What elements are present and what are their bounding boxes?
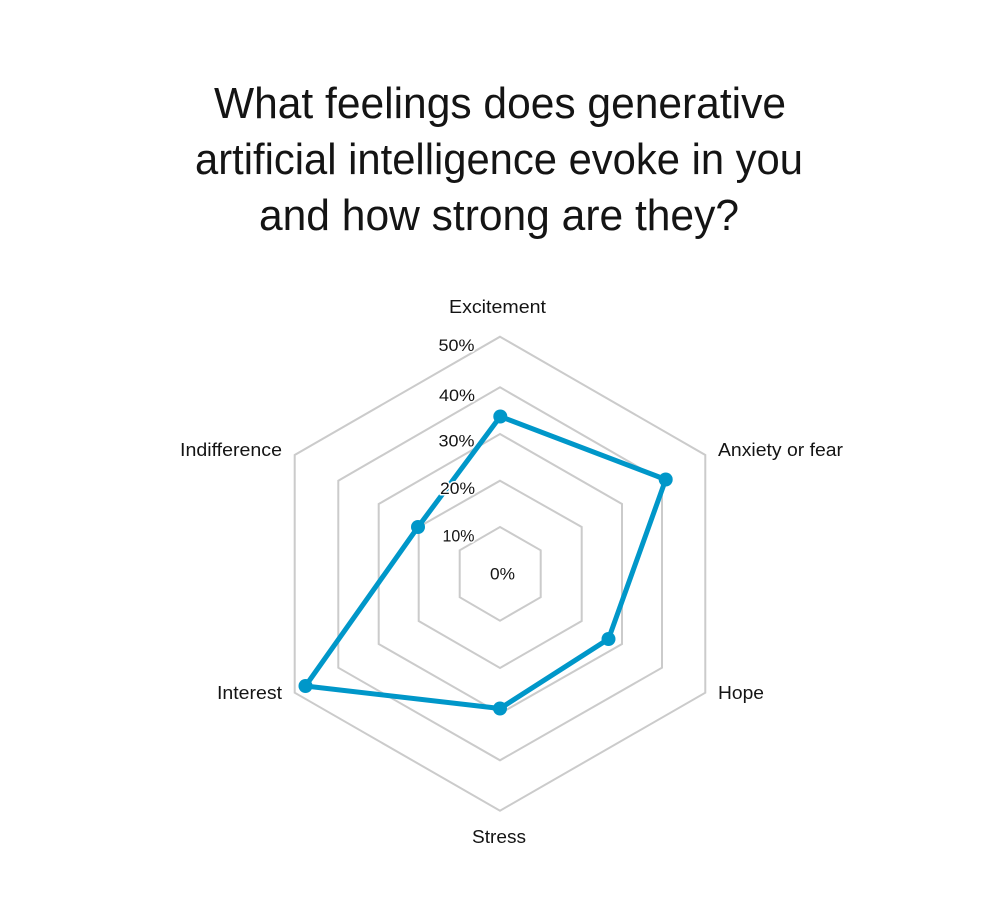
- scale labels: [438, 336, 515, 584]
- axis labels: Interest: [217, 683, 282, 703]
- axis labels: Indifference: [180, 440, 282, 460]
- axis labels: Excitement: [449, 297, 546, 317]
- scale labels: 0%: [490, 564, 515, 584]
- radar chart: [180, 297, 843, 847]
- axis labels: Hope: [718, 683, 764, 703]
- data line: [306, 416, 666, 708]
- title: artificial intelligence evoke in you: [195, 135, 803, 184]
- axis labels: [180, 297, 843, 847]
- title: What feelings does generative: [214, 79, 786, 128]
- scale labels: 50%: [438, 336, 474, 355]
- scale labels: 20%: [440, 479, 475, 498]
- grid hexagons: [295, 337, 705, 811]
- scale labels: 30%: [438, 432, 474, 450]
- scale labels: 40%: [439, 386, 475, 405]
- axis labels: Stress: [472, 827, 526, 847]
- scale labels: 10%: [442, 526, 474, 546]
- title: [195, 79, 803, 240]
- title: and how strong are they?: [259, 191, 739, 240]
- data points: [298, 410, 673, 716]
- axis labels: Anxiety or fear: [718, 440, 843, 460]
